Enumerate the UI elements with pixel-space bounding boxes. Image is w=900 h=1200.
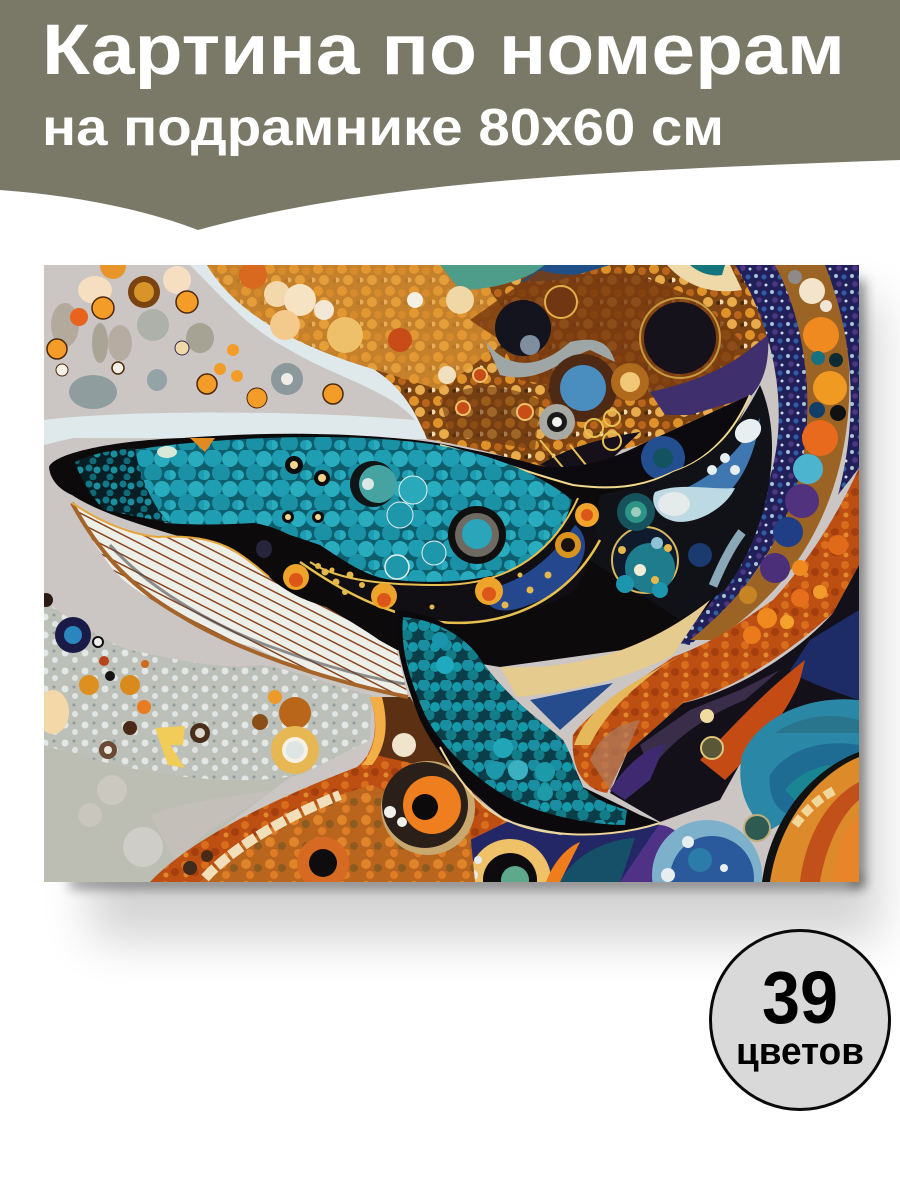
badge: 39 colours — [710, 930, 890, 1110]
painting: whale — [37, 253, 859, 930]
flipper: teal tail fin — [395, 610, 660, 835]
lower baleen strip — [500, 600, 710, 697]
badge label: цветов — [736, 1031, 864, 1073]
painting background — [44, 265, 859, 882]
whale body — [49, 434, 737, 667]
whale belly trim with orange spots — [256, 498, 600, 623]
canvas shadow — [70, 280, 880, 940]
right centre dark area with light blue shapes — [590, 385, 772, 620]
orange bottom-left shape with eyes — [150, 697, 507, 889]
badge number: 39 — [762, 956, 838, 1039]
whale mouth: striped baleen — [72, 503, 408, 697]
dark area between tentacles — [610, 565, 859, 822]
gold ring band with circles — [690, 265, 849, 640]
gold upper region — [207, 261, 775, 470]
blue patch under the whale — [530, 683, 613, 730]
subtitle: на подрамнике 80х60 см — [42, 99, 724, 157]
speckled bottom-left background — [37, 593, 372, 882]
blue swirls bottom right — [740, 699, 859, 830]
orange stripes bottom right corner — [762, 752, 859, 882]
header banner — [0, 0, 900, 230]
top right navy corner — [825, 265, 859, 495]
title: Картина по номерам — [42, 11, 845, 90]
cluster of blue circles behind the body — [612, 493, 678, 598]
orange tentacle right — [573, 468, 859, 793]
whale skin: teal scales — [75, 437, 572, 582]
navy strip bottom centre with gold arc — [470, 821, 660, 882]
speckled top-left background — [44, 253, 427, 445]
dark spiral band with blue dots — [680, 265, 808, 645]
black crescent — [440, 395, 750, 487]
blue circle bottom — [620, 814, 771, 882]
